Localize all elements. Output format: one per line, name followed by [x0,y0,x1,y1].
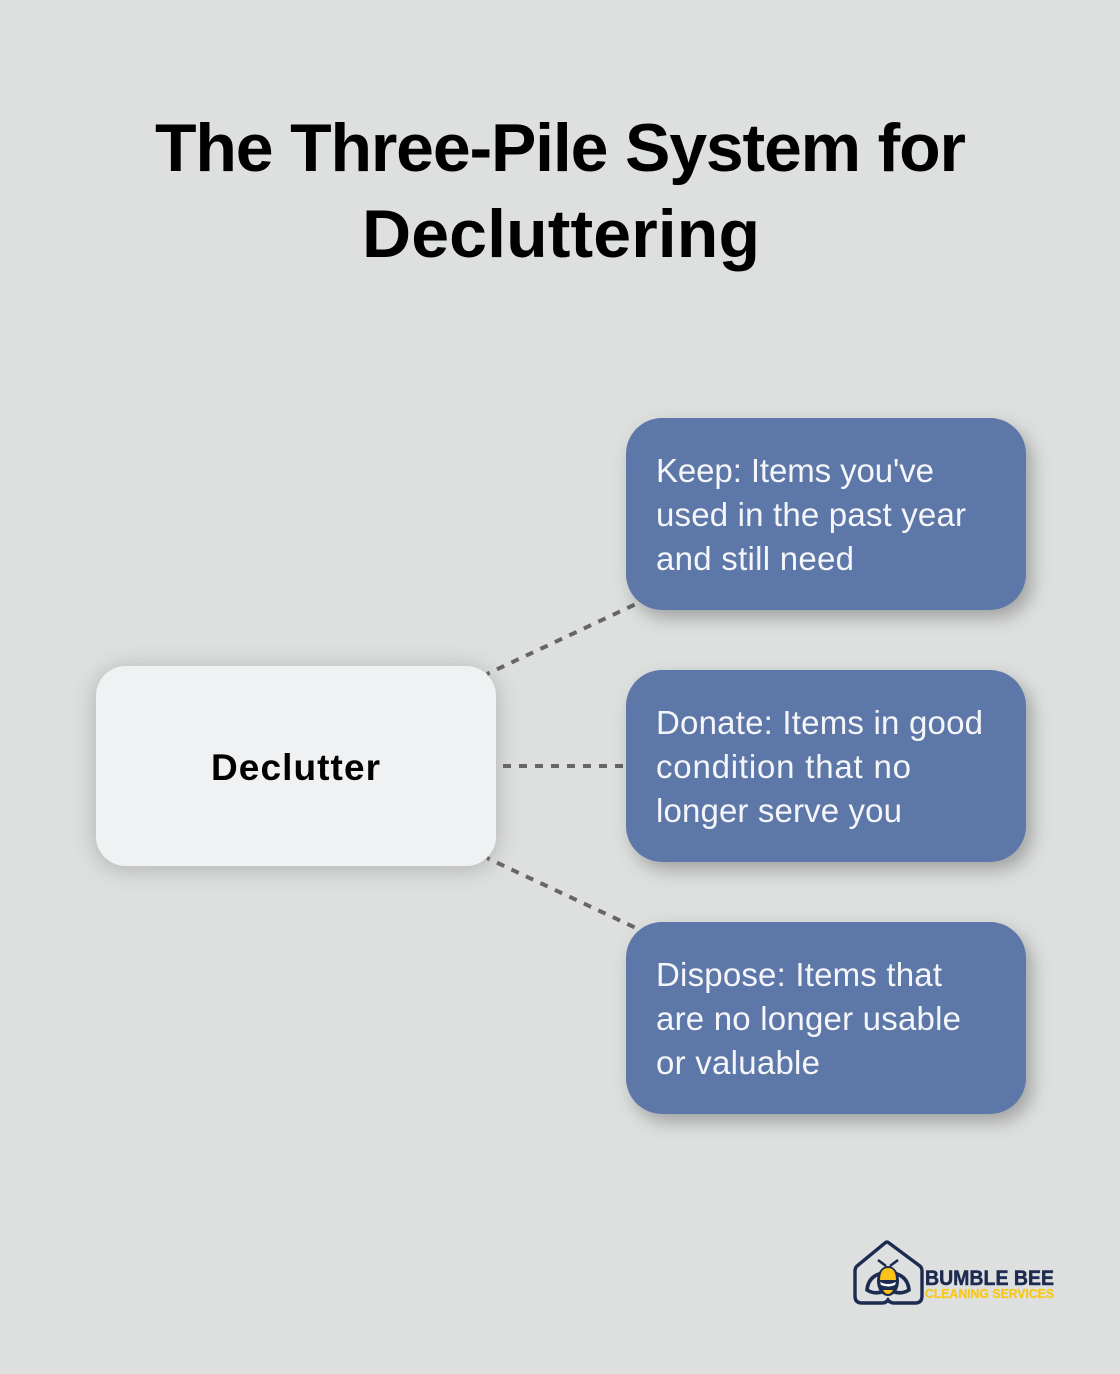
panel: keep: used in the past year [656,496,966,533]
connector: declutter to dispose [487,858,636,928]
connector: declutter to keep [487,604,636,674]
wordmark: BUMBLE BEE [925,1267,1054,1290]
panel: donate: longer serve you [656,792,902,829]
logo: bumble bee cleaning services [855,1242,1054,1303]
panel: keep: Keep: Items you've [656,452,934,489]
panel: donate: Donate: Items in good [656,704,983,741]
panel: dispose [626,922,1026,1114]
icon: house with bee [855,1242,922,1303]
panel: keep [626,418,1026,610]
panel: dispose: Dispose: Items that [656,956,942,993]
title: The Three-Pile System for [155,110,966,186]
title: Decluttering [362,196,760,272]
connector: declutter to donate [503,764,623,768]
panel: declutter [96,666,496,866]
panel: donate: condition that no [656,748,911,785]
panel: declutter: Declutter [211,747,380,788]
tagline: CLEANING SERVICES [925,1287,1054,1301]
panel: dispose: are no longer usable [656,1000,961,1037]
panel: donate [626,670,1026,862]
panel: keep: and still need [656,540,854,577]
title [155,110,966,272]
panel: dispose: or valuable [656,1044,820,1081]
